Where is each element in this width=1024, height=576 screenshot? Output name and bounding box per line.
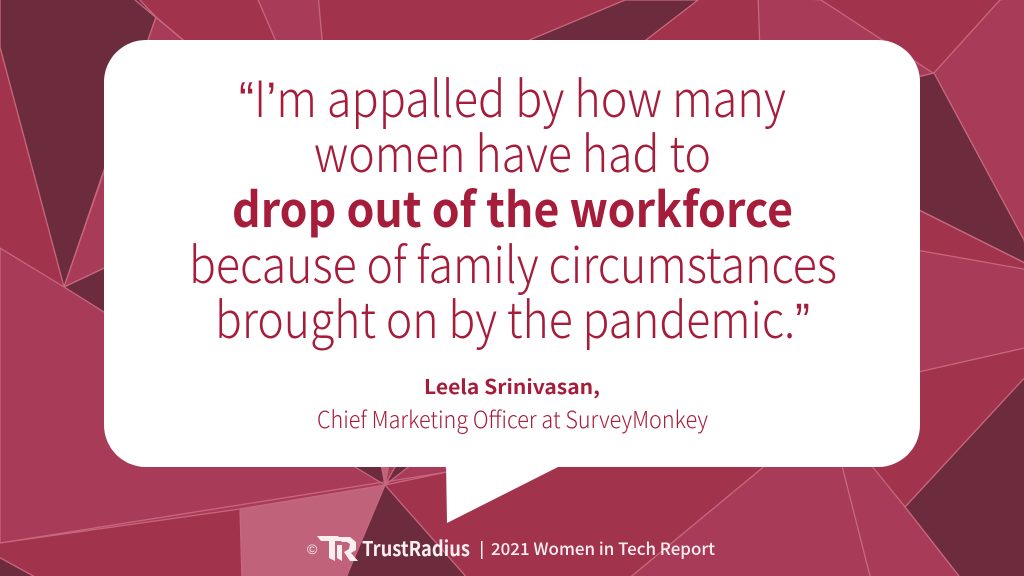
quote text (189, 60, 837, 353)
icon: TrustRadius logo (317, 536, 358, 561)
quote text: brought on by the pandemic.” (215, 281, 810, 353)
quote text: women have had to (314, 115, 711, 187)
quote text: because of family circumstances (189, 226, 837, 298)
quote text: “I’m appalled by how many (239, 60, 786, 132)
copyright mark: © (307, 541, 318, 557)
logo wordmark: TrustRadius (362, 532, 470, 562)
quote text: drop out of the workforce (232, 171, 793, 241)
attribution name: Leela Srinivasan, (424, 371, 600, 400)
report title: 2021 Women in Tech Report (491, 535, 715, 560)
attribution title: Chief Marketing Officer at SurveyMonkey (317, 401, 708, 435)
speech bubble (104, 40, 920, 523)
divider (481, 541, 482, 559)
footer branding (307, 532, 715, 562)
